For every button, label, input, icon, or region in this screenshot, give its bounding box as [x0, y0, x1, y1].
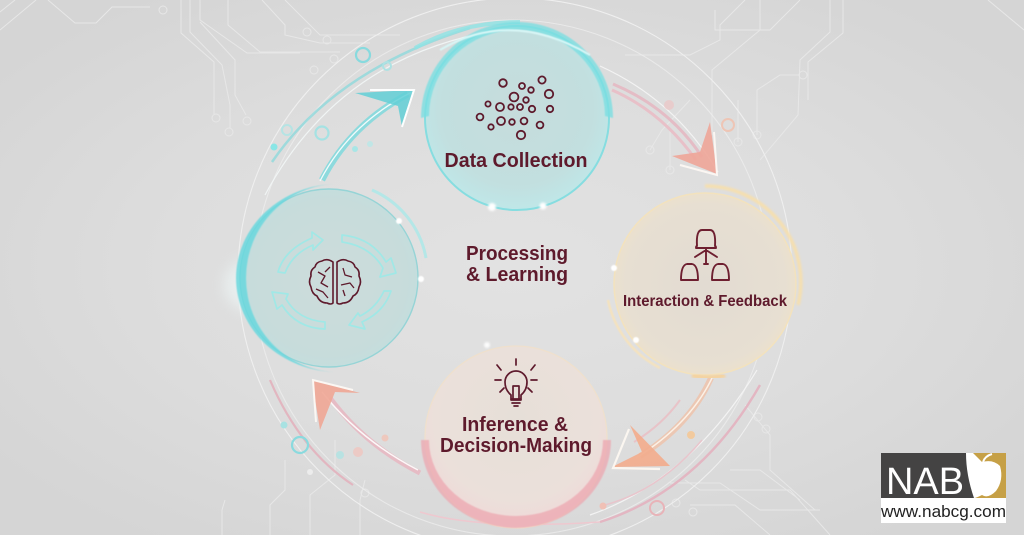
- cyan left arc: [236, 184, 338, 372]
- label: processing and learning: & Learning: [466, 264, 568, 286]
- label: processing and learning: [466, 243, 568, 286]
- label: data collection: Data Collection: [444, 150, 588, 172]
- panel: processing and learning: [224, 184, 426, 372]
- label: inference and decision-making: [440, 413, 592, 457]
- panel: inference and decision-making: [421, 342, 611, 528]
- icon: brain: [310, 260, 360, 304]
- arc arrow: data collection to interaction: [600, 66, 734, 175]
- logo url: www.nabcg.com: [880, 502, 1006, 521]
- arc arrow: inference to processing: [270, 380, 420, 485]
- outer teal sweep at top: [265, 22, 520, 475]
- label: inference and decision-making: Inference &: [462, 413, 568, 436]
- icon: light bulb: [495, 359, 537, 406]
- logo: NAB: [880, 453, 1006, 523]
- panel: interaction and feedback: [608, 186, 801, 378]
- logo wordmark: NAB: [886, 461, 964, 503]
- large thin orbit rings: [238, 0, 792, 535]
- arc arrow: processing to data collection: [320, 90, 414, 181]
- lower orbit sweep: [420, 370, 760, 524]
- cyan crown arc: [421, 22, 613, 118]
- icon: data points: [477, 76, 553, 139]
- label: inference and decision-making: Decision-Making: [440, 434, 592, 457]
- panel: data collection: [421, 22, 613, 211]
- label: interaction and feedback: Interaction & Feedback: [623, 293, 787, 310]
- logo apple: [966, 453, 1001, 498]
- pink lower arc: [421, 440, 611, 528]
- label: processing and learning: Processing: [466, 243, 568, 265]
- icon: circular arrows: [272, 232, 396, 329]
- arc arrow: interaction to inference: [612, 378, 712, 469]
- amber arc: [705, 186, 801, 305]
- icon: hierarchy of people: [681, 230, 729, 280]
